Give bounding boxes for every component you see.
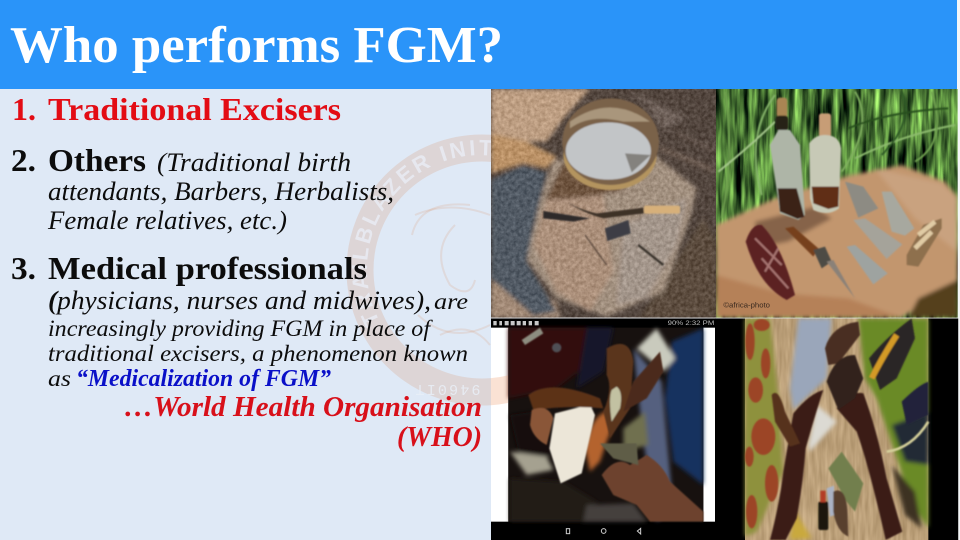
list item 2: others: attendants, Barbers, Herbalists, (48, 177, 394, 206)
list item 1: traditional excisers: 1. (12, 91, 36, 127)
list item 2: others: 2. (11, 142, 36, 178)
watermark: Trailblazer seal (346, 134, 491, 406)
phone navigation buttons (566, 528, 641, 534)
title: Who performs FGM? (10, 17, 503, 74)
panel: pale blue text background (0, 89, 491, 540)
photo: bottles and metal blades on a wooden board (716, 89, 958, 318)
phone status bar text: 90% 2:32 PM (668, 321, 714, 327)
white letterbox bars (491, 328, 716, 522)
key term: “Medicalization of FGM” (76, 366, 331, 392)
list item 2: others: Others (48, 142, 146, 178)
phone status bar icons (493, 321, 539, 325)
list item 3: medical professionals: 3. (11, 250, 36, 286)
list item 3: medical professionals: (physicians, nurses and midwives), (48, 286, 431, 315)
photo credit: ©africa-photo (723, 302, 770, 310)
watermark number: 9460IT (416, 380, 480, 397)
grass (716, 89, 958, 318)
list item 2: others: Female relatives, etc.) (47, 206, 287, 235)
attribution: World Health Organisation: …World Health Organisation (124, 391, 482, 423)
photo: excision scene with patterned fabrics on a reed mat (715, 318, 958, 540)
watermark ring (346, 134, 491, 406)
attribution: World Health Organisation: (WHO) (397, 421, 482, 453)
header band (0, 0, 957, 89)
list item 3: medical professionals: Medical professionals (48, 250, 367, 286)
rock and soil texture (491, 89, 716, 318)
watermark script monogram (412, 204, 490, 345)
watermark ring lettering: TRAILBLAZER INIT (352, 140, 491, 328)
list item 3: medical professionals: are (434, 289, 468, 314)
list item 2: others (11, 142, 394, 235)
list item 3: medical professionals: as (48, 366, 71, 391)
grass highlights (718, 92, 955, 218)
list item 3: medical professionals (11, 250, 468, 392)
list item 3: medical professionals: increasingly providing FGM in place of (48, 316, 434, 341)
photo: bowl, razor blade and knife on a rock (491, 89, 716, 318)
list item 1: traditional excisers: Traditional Excisers (48, 91, 341, 127)
reed mat texture (745, 318, 928, 540)
photo: phone screenshot of a medicalized procedure (491, 318, 716, 540)
watermark continuation on white bar (491, 376, 508, 406)
list item 3: medical professionals: traditional excisers, a phenomenon known (48, 341, 468, 366)
attribution: World Health Organisation (124, 391, 482, 453)
list item 2: others: (Traditional birth (157, 148, 351, 177)
